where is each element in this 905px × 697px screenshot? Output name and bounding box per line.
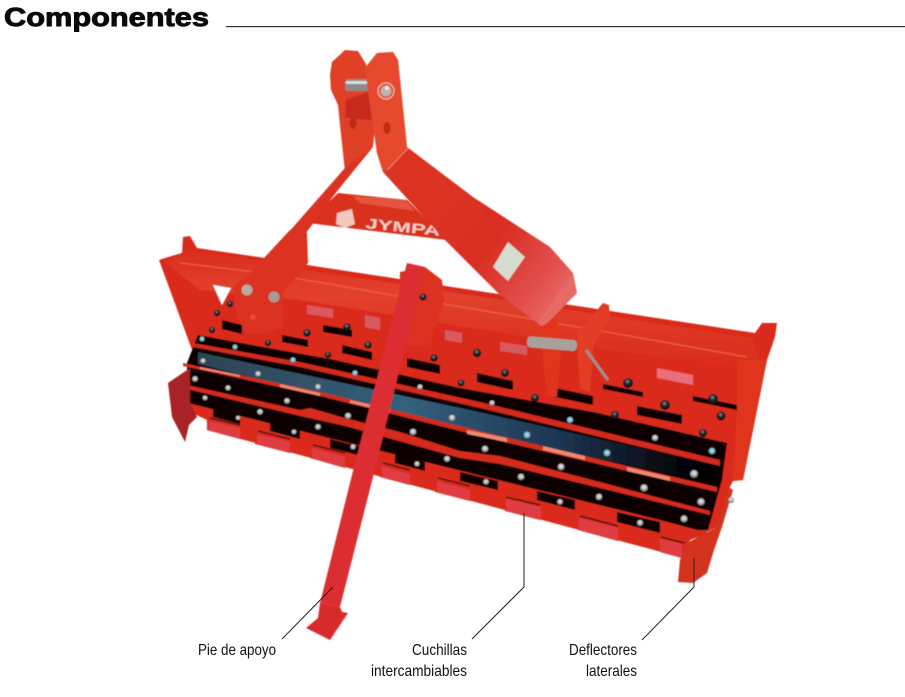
label: Deflectores laterales: laterales [586,663,637,680]
leader line: Deflectores [642,558,694,640]
blue blade bar [198,352,720,484]
mount plates [307,305,693,385]
bolts dark [209,301,726,437]
right end plate [733,360,767,481]
middle red strip [187,385,710,515]
lower tooth plate [188,403,709,558]
support leg [320,263,425,607]
heading rule [226,26,905,27]
hitch holes [350,117,390,134]
left lug [233,230,308,333]
leader line: Cuchillas [472,513,524,639]
right side bolt [728,497,734,503]
red strip above bar [193,343,720,466]
hitch pin [345,79,369,91]
label: Deflectores laterales: Deflectores [569,642,637,659]
top tooth notches [222,320,737,424]
bolts silver [192,358,705,526]
main frame silhouette [159,236,777,557]
label: Cuchillas intercambiables: intercambiables [371,663,467,680]
blade reflections [200,367,670,481]
CE label [493,242,525,281]
hitch fastener [378,83,394,99]
cross bar with brand [308,193,447,240]
right arm of hitch [365,52,577,327]
machine: red soil leveller [159,50,777,640]
title: Componentes [4,2,209,32]
blade slots [210,418,685,543]
leader line: Pie de apoyo [282,587,333,639]
label: Pie de apoyo: Pie de apoyo [198,642,276,659]
replaceable blade tips [209,421,682,558]
three-point hitch: rear plate [330,50,376,172]
rear plate shadow [345,92,372,120]
leg foot [306,603,348,640]
left frame cut-out [213,285,231,305]
black blade area [187,335,727,530]
right deflector [678,487,733,583]
leg bracket [398,267,444,345]
leg clip [420,294,426,300]
label: Deflectores laterales [569,642,637,680]
label: Cuchillas intercambiables: Cuchillas [412,642,467,659]
centre bracket [540,318,562,397]
left deflector [168,368,197,442]
lower notches [213,409,660,533]
left hitch arm [240,147,373,285]
lug pin [242,284,280,320]
label: Cuchillas intercambiables [371,642,467,680]
arm end fold [538,273,577,327]
plate fold [387,148,408,170]
side bracket [577,303,610,392]
brand mark [336,209,355,228]
bracket pin [527,336,608,380]
red strip below bar [183,363,717,492]
bolts blue [199,336,715,456]
front hitch plate [365,52,407,172]
brand text: JYMPA [365,215,441,239]
beam highlight [180,263,747,357]
beam top face [165,250,762,370]
